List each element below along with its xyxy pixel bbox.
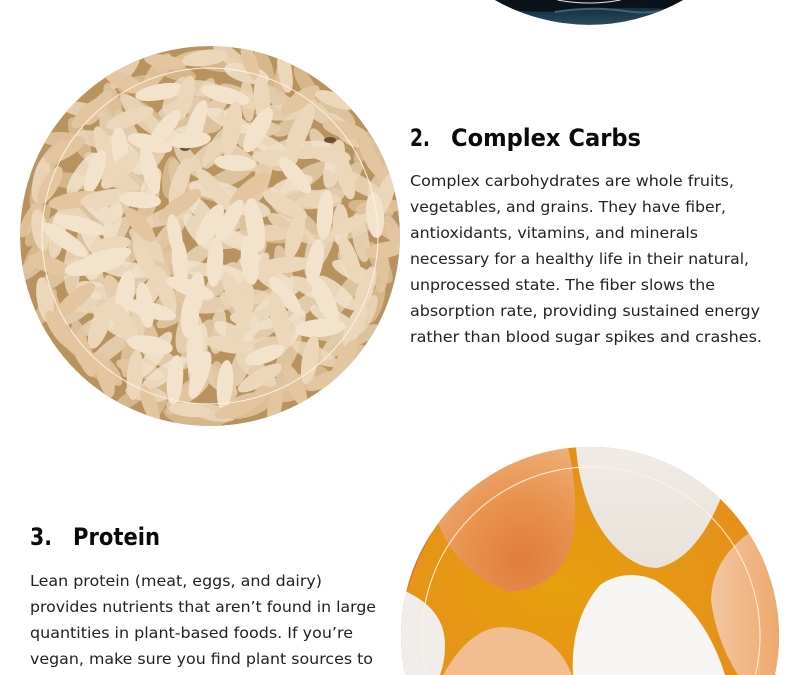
text block: complex carbs description: unprocessed state. The fiber slows the xyxy=(410,276,715,294)
heading: protein: 3. xyxy=(30,523,52,551)
photo: dark circle cropped at top xyxy=(490,0,690,26)
heading: protein: Protein xyxy=(73,523,160,551)
decorative ring on eggs photo xyxy=(422,467,760,675)
decorative ring on rice photo xyxy=(42,68,378,404)
text block: protein description: provides nutrients that aren’t found in large xyxy=(30,598,376,616)
heading: complex carbs: 2. xyxy=(410,124,430,152)
text block: protein description: vegan, make sure you find plant sources to xyxy=(30,650,373,668)
text block: complex carbs description: Complex carbohydrates are whole fruits, xyxy=(410,172,734,190)
text block: complex carbs description: antioxidants, vitamins, and minerals xyxy=(410,224,698,242)
text block: protein description xyxy=(30,572,376,668)
text block: protein description: quantities in plant-based foods. If you’re xyxy=(30,624,353,642)
text block: complex carbs description: vegetables, and grains. They have fiber, xyxy=(410,198,726,216)
photo: eggs circle xyxy=(400,446,780,675)
text block: complex carbs description: rather than blood sugar spikes and crashes. xyxy=(410,328,762,346)
heading: complex carbs: Complex Carbs xyxy=(451,124,641,152)
text block: complex carbs description xyxy=(410,172,762,346)
text block: complex carbs description: necessary for a healthy life in their natural, xyxy=(410,250,749,268)
photo: brown rice circle xyxy=(20,46,400,426)
text block: complex carbs description: absorption rate, providing sustained energy xyxy=(410,302,760,320)
heading: protein xyxy=(30,523,160,551)
text block: protein description: Lean protein (meat, eggs, and dairy) xyxy=(30,572,322,590)
